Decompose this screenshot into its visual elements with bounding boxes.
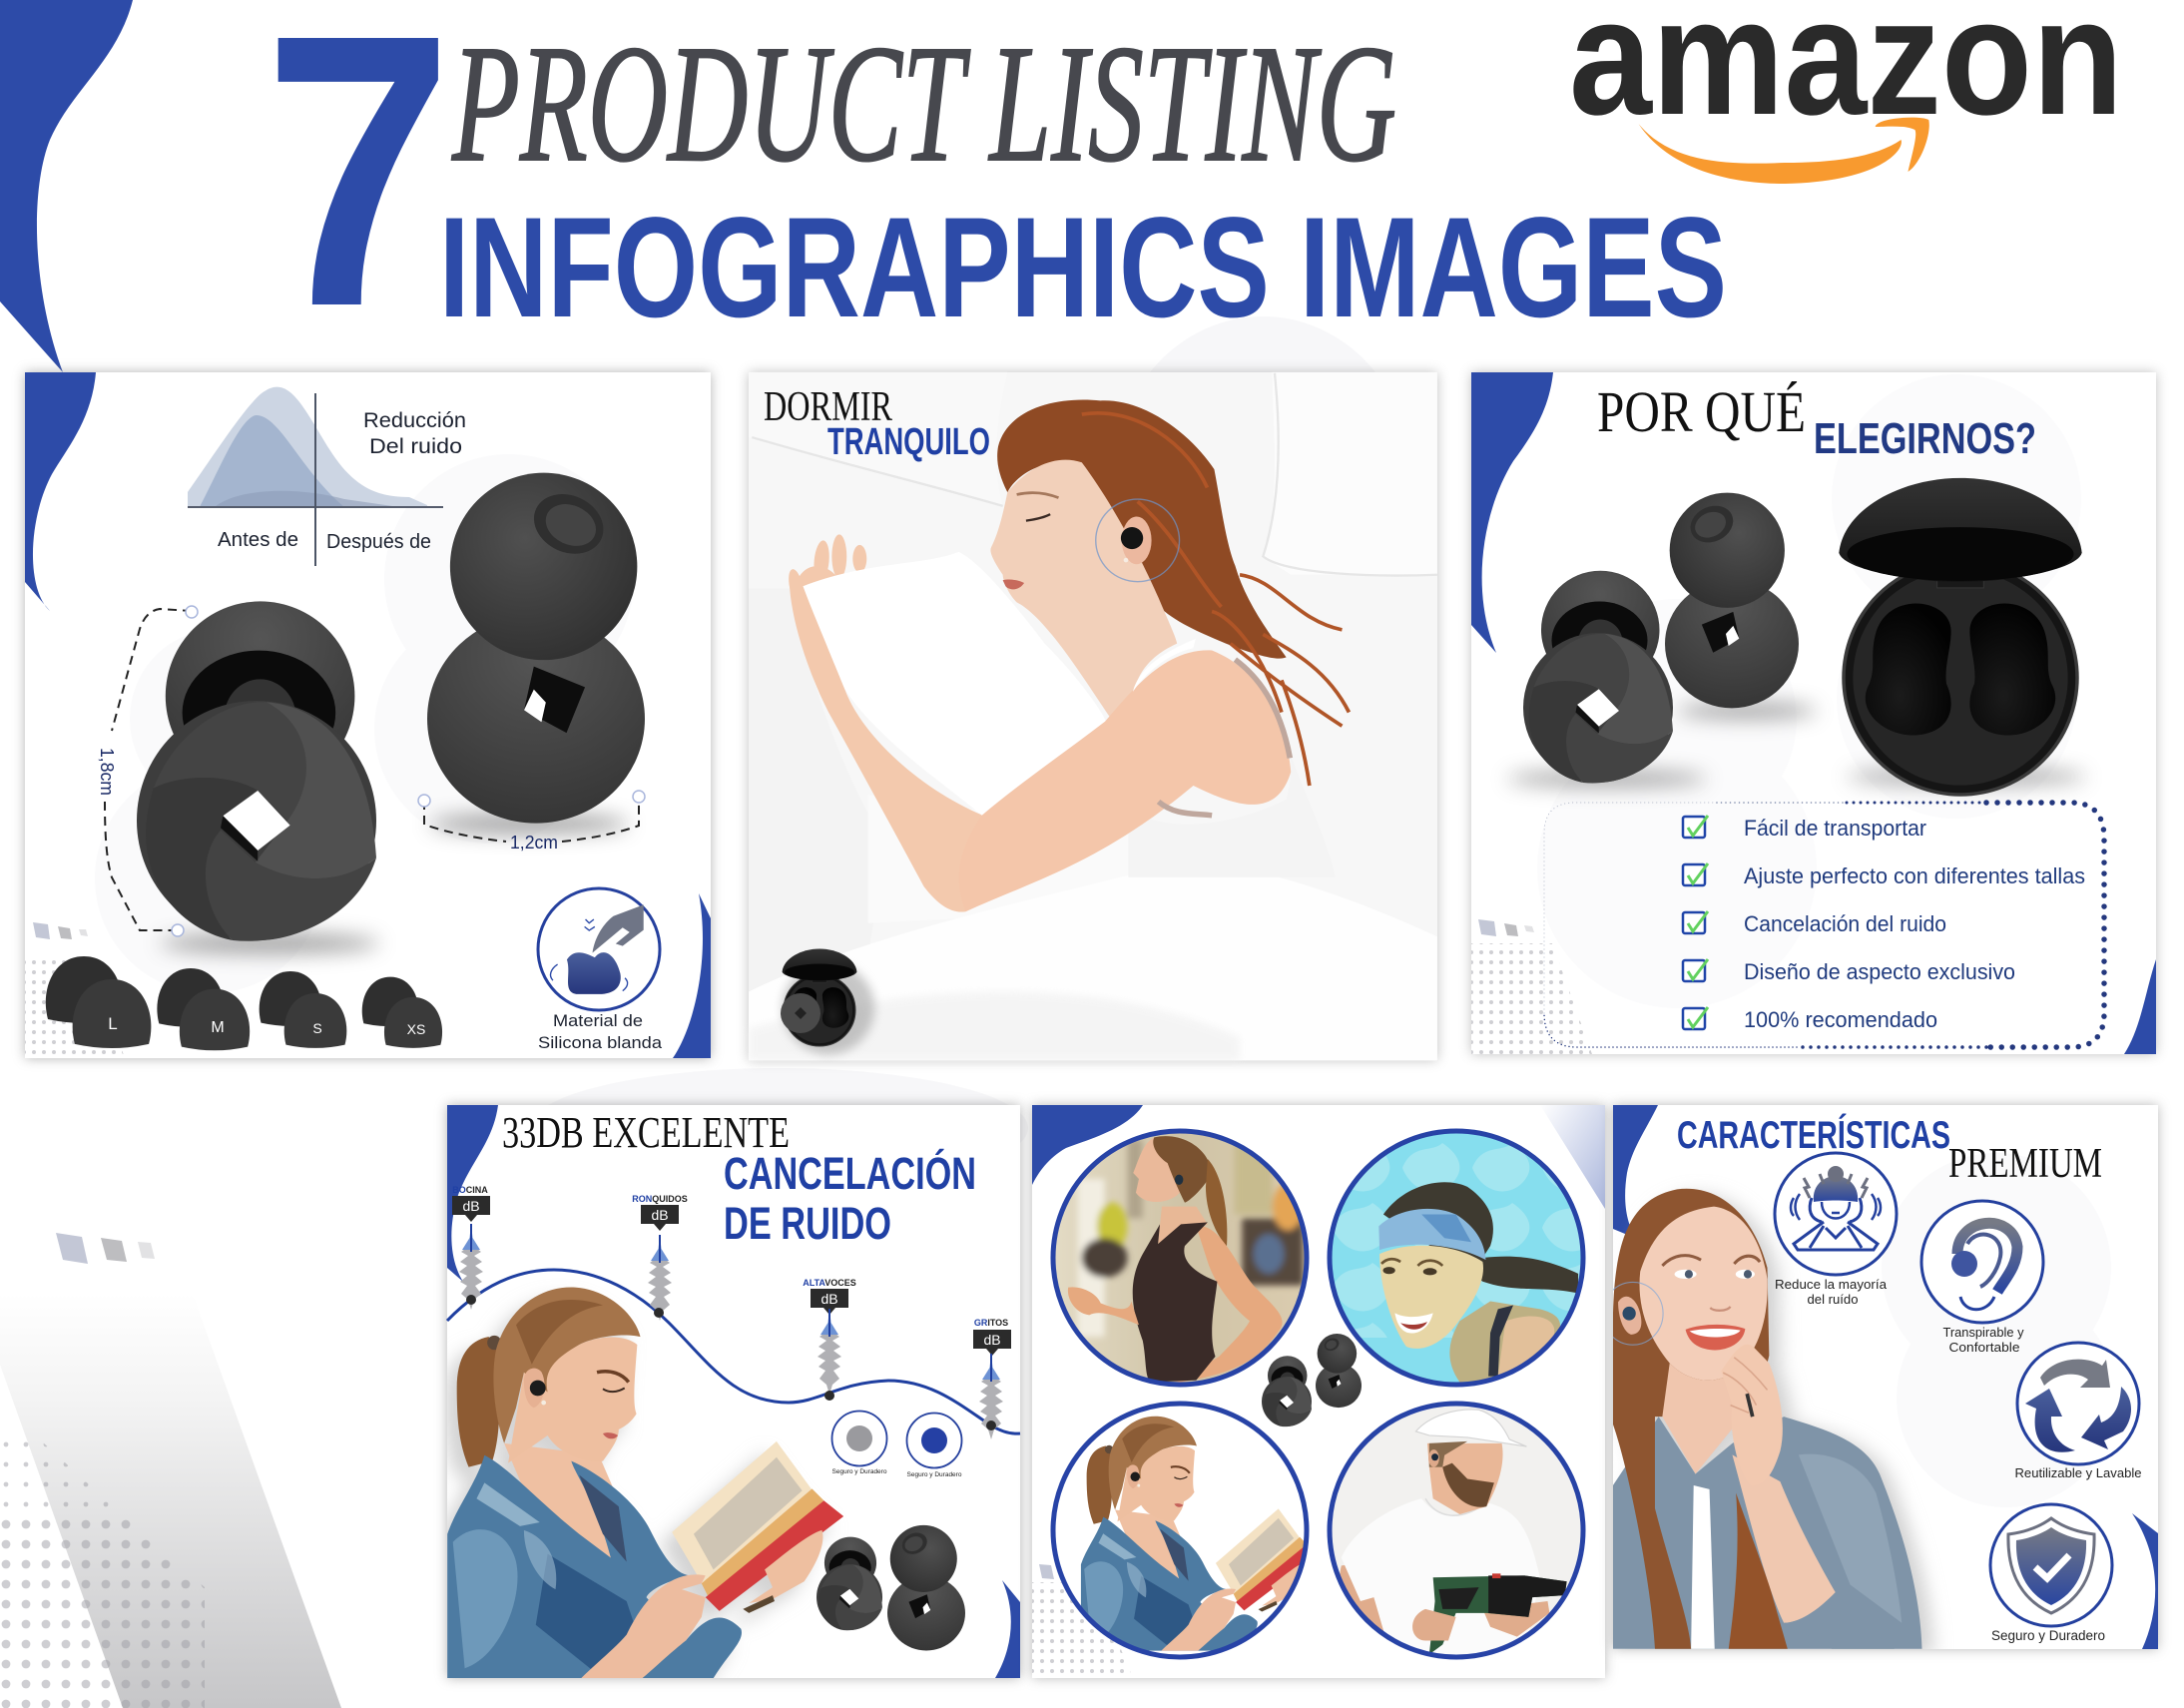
title: de ruido: DE RUIDO (724, 1198, 891, 1249)
dotted decoration (1032, 1582, 1133, 1678)
noise source: bocina: dB (462, 1198, 480, 1214)
squares decoration (1478, 919, 1534, 936)
feature: breathable: Confortable (1948, 1340, 2020, 1355)
title: premium: PREMIUM (1948, 1141, 2102, 1187)
feature: reduces noise: Reduce la mayoría (1775, 1277, 1888, 1292)
title: elegirnos: ELEGIRNOS? (1814, 414, 2036, 463)
photo: woman sleeping (749, 372, 1437, 1060)
noise reduction chart (188, 387, 443, 566)
dotted decoration (1471, 943, 1592, 1054)
noise source: altavoces (803, 1278, 856, 1401)
ear tips sizes L M S XS: XS (407, 1021, 425, 1037)
dotted decoration (25, 958, 125, 1058)
ear tips sizes L M S XS: L (108, 1014, 118, 1033)
earplug: twisted (1523, 571, 1673, 783)
gradient corner top-right (1540, 1105, 1605, 1209)
title: por que: POR QUÉ (1597, 379, 1806, 444)
photo circle: construction worker (1328, 1402, 1585, 1659)
squares decoration (33, 922, 88, 939)
dimension 1,2cm: 1,2cm (510, 833, 558, 853)
noise source: altavoces: ALTAVOCES (803, 1278, 856, 1288)
title: 33 dB excellent: 33DB EXCELENTE (502, 1108, 790, 1157)
noise source: gritos: GRITOS (974, 1318, 1008, 1328)
icon caption: silicone: Material de (553, 1011, 643, 1030)
photo: woman reading (435, 1288, 843, 1690)
dimension 1,8cm: 1,8cm (97, 748, 117, 796)
blue corner bottom-right (995, 1580, 1020, 1678)
earplug: side (887, 1525, 965, 1650)
chart label: noise: Del ruido (369, 435, 462, 458)
feature: reduces noise: del ruído (1807, 1292, 1859, 1307)
chart label: reduction: Reducción (363, 409, 466, 432)
icon: soft silicone (538, 888, 660, 1010)
carry case open (1839, 478, 2082, 795)
feature: reduces noise (1775, 1153, 1897, 1307)
dimension 1,2cm (418, 791, 645, 853)
earplug: twisted (1262, 1356, 1312, 1426)
ear tips sizes L M S XS: M (211, 1019, 225, 1036)
feature: breathable: Transpirable y (1942, 1325, 2024, 1340)
feature: reusable (2014, 1343, 2142, 1480)
earplug: side (1665, 493, 1799, 708)
title line: product listing: PRODUCT LISTING (451, 11, 1396, 197)
background grey band and dots bottom-left (0, 1233, 341, 1708)
chart label: before: Antes de (218, 529, 298, 551)
blue corner bottom-right (2124, 959, 2156, 1054)
feature: safe: Seguro y Duradero (1991, 1628, 2105, 1643)
marker: blue: Seguro y Duradero (907, 1471, 962, 1478)
noise source: ronquidos: RONQUIDOS (632, 1194, 688, 1204)
background ghost shapes (529, 316, 1412, 1188)
photo circle: runner (1048, 1128, 1318, 1398)
noise source: ronquidos: dB (651, 1207, 669, 1223)
title: tranquilo: TRANQUILO (827, 421, 990, 463)
feature: reusable: Reutilizable y Lavable (2014, 1465, 2142, 1480)
panel: why choose us (1471, 372, 2156, 1054)
panel: noise cancellation (435, 1105, 1020, 1690)
photo circle: swimmer (1328, 1128, 1585, 1388)
title line: infographics images: INFOGRAPHICS IMAGES (439, 189, 1727, 347)
blue corner bottom-right (2132, 1513, 2158, 1649)
marker: grey (832, 1412, 887, 1475)
earplug shadows (160, 814, 629, 953)
blue corner top-left (1032, 1105, 1143, 1185)
ghost shapes panel 1 (95, 454, 634, 993)
feature: safe (1990, 1504, 2112, 1643)
ghost shapes panel 6 (1882, 1153, 2116, 1507)
icon caption: silicone: Silicona blanda (538, 1033, 663, 1052)
blue corner top-left (447, 1105, 498, 1282)
check item 1: Fácil de transportar (1744, 816, 1926, 841)
noise source: bocina (452, 1185, 490, 1310)
square decoration (1039, 1564, 1054, 1579)
title: caracteristicas: CARACTERÍSTICAS (1677, 1113, 1950, 1157)
panel: sleeping woman (749, 372, 1437, 1060)
panel: premium features (1603, 1105, 2158, 1655)
dotted feature box (1544, 803, 2104, 1047)
earplug: twisted front view (137, 601, 376, 941)
noise source: bocina: BOCINA (452, 1185, 488, 1195)
check item 4: Diseño de aspecto exclusivo (1744, 959, 2015, 984)
dimension 1,8cm (97, 606, 198, 936)
check item 3: Cancelación del ruido (1744, 911, 1946, 936)
title: cancelacion: CANCELACIÓN (724, 1148, 976, 1199)
icon caption: silicone (538, 1011, 663, 1052)
noise source: ronquidos (632, 1194, 688, 1321)
ghost shapes panel 3 (1537, 374, 2081, 1008)
ear tips sizes L M S XS (46, 956, 442, 1050)
product: carry case small (781, 948, 874, 1054)
chart label: after: Después de (326, 531, 431, 553)
noise source: gritos (973, 1318, 1011, 1439)
ear tips sizes L M S XS: S (312, 1020, 322, 1036)
photo: smiling woman (1603, 1189, 1933, 1655)
noise source: gritos: dB (983, 1332, 1001, 1348)
decorative blue wave top-left (0, 0, 133, 372)
checklist (1683, 816, 2085, 1032)
feature: breathable (1921, 1201, 2043, 1355)
earplug: side view (427, 473, 645, 824)
photo circle: reader (1048, 1398, 1319, 1667)
noise curve (447, 1270, 1020, 1433)
check item 2: Ajuste perfecto con diferentes tallas (1744, 863, 2085, 888)
shadows (1507, 703, 2086, 787)
panel: use cases (1032, 1105, 1605, 1678)
blue corner top-left (1471, 372, 1553, 653)
earplug: side (1316, 1334, 1362, 1408)
blue corner top-left (25, 372, 96, 611)
noise source: altavoces: dB (820, 1291, 838, 1307)
check item 5: 100% recomendado (1744, 1007, 1937, 1032)
marker: grey: Seguro y Duradero (832, 1468, 887, 1475)
marker: blue (906, 1414, 962, 1478)
earplug: twisted (817, 1537, 882, 1630)
blue corner top-left (1613, 1105, 1658, 1239)
panel: product sizes and noise reduction (25, 372, 711, 1058)
blue corner bottom-right (673, 893, 711, 1058)
title: dormir: DORMIR (764, 384, 892, 430)
